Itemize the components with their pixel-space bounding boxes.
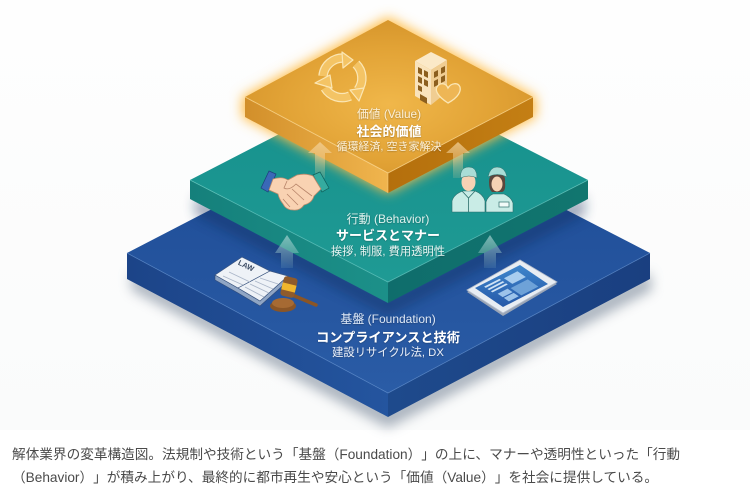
gold glow [242,17,536,193]
icon: tablet [467,260,557,316]
text: behavior labels: 挨拶, 制服, 費用透明性 [331,244,445,258]
arrow: foundation to behavior, left [275,235,299,268]
text: foundation labels: コンプライアンスと技術 [316,329,460,345]
woman [486,167,513,212]
gavel [270,276,316,312]
text: foundation labels: 基盤 (Foundation) [340,312,436,326]
man [452,167,485,212]
platform shadow [195,195,585,316]
icon: building with heart [415,52,460,105]
arrow: behavior to value, left [308,142,332,178]
text: value labels: 社会的価値 [356,124,422,139]
blue top surface [127,118,650,393]
gold top surface [245,20,533,173]
teal top surface [190,78,588,282]
text: value labels [336,107,442,153]
caption text: 解体業界の変革構造図。法規制や技術という「基盤（Foundation）」の上に、マナーや透明性といった「行動 [12,447,680,462]
caption text: （Behavior）」が積み上がり、最終的に都市再生や安心という「価値（Value）」を社会に提供している。 [12,470,658,485]
arrow: foundation to behavior, right [478,235,502,268]
book: LAW [237,258,256,274]
blue left side [127,253,388,417]
text: value labels: 価値 (Value) [357,107,421,121]
arrow: behavior to value, right [446,142,470,178]
icon: recycling circular arrows [315,52,364,101]
icon: handshake [261,171,329,210]
icon: law book and gavel [215,257,316,312]
blue right side [388,253,650,417]
text: value labels: 循環経済, 空き家解決 [336,139,442,153]
platform shadow [130,272,652,428]
gold left side [245,97,388,193]
teal left side [190,180,388,303]
text: behavior labels [331,212,445,258]
gold right side [388,97,533,193]
text: foundation labels: 建設リサイクル法, DX [332,346,444,359]
text: behavior labels: サービスとマナー [336,228,440,243]
layer: value platform [242,17,536,193]
heart [436,84,460,103]
caption text [12,447,680,485]
layer: behavior platform [190,78,588,316]
text: foundation labels [316,312,460,359]
icon: staff members [452,167,513,212]
text: behavior labels: 行動 (Behavior) [347,212,429,226]
teal right side [388,180,588,303]
layer: foundation platform [127,118,652,428]
